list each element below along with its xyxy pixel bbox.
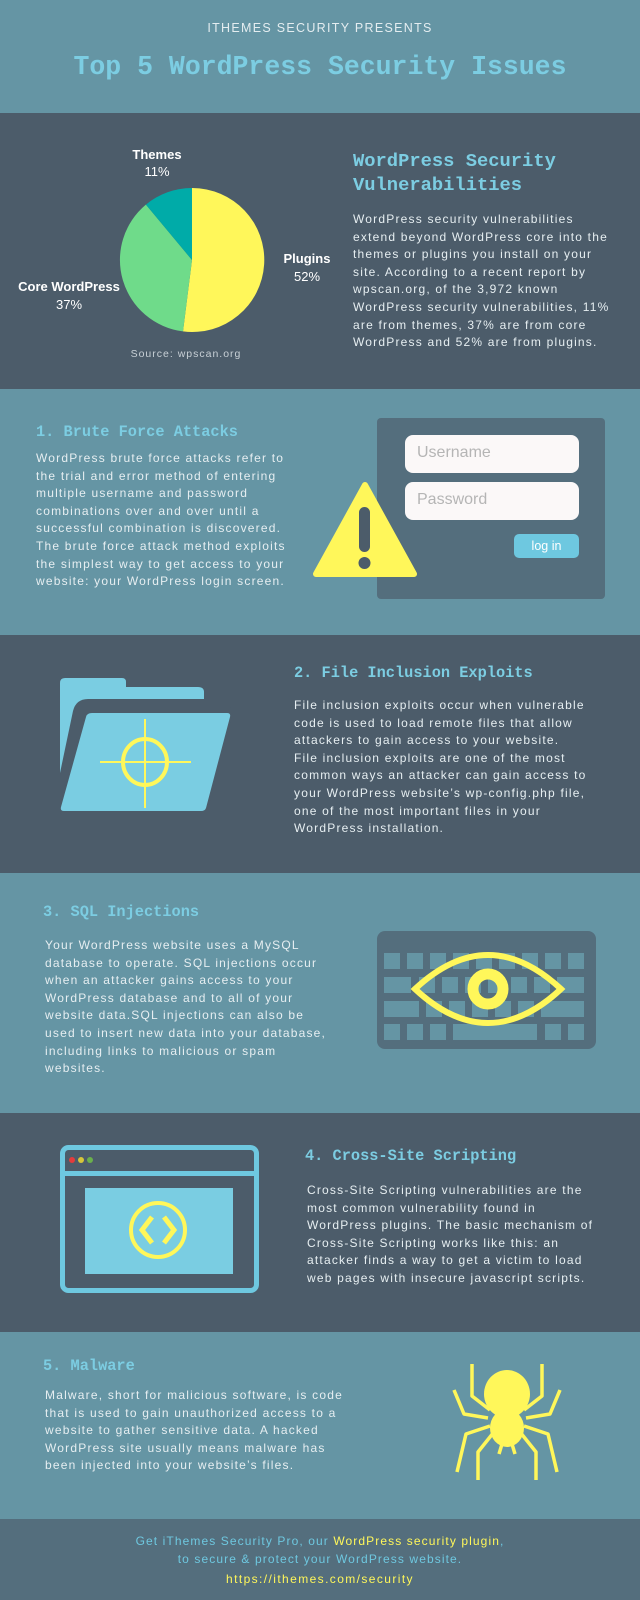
- text: malware: website to gather sensitive data. A hacked: [45, 1423, 319, 1437]
- text: brute force: The brute force attack method exploits: [36, 539, 286, 553]
- icon: spider: [452, 1364, 562, 1480]
- text: xss: Cross-Site Scripting works like this: an: [307, 1236, 559, 1250]
- text: vulnerabilities: site. According to a recent report by: [353, 265, 586, 279]
- text: brute force: WordPress brute force attacks refer to: [36, 451, 284, 465]
- icon: warning: [313, 482, 417, 577]
- footer text: [136, 1534, 504, 1566]
- footer url: https://ithemes.com/security: [226, 1572, 414, 1586]
- panel: footer: [0, 1519, 640, 1600]
- text: malware: been injected into your website’s files.: [45, 1458, 294, 1472]
- text: sql: used to insert new data into your database,: [45, 1026, 326, 1040]
- text: xss: WordPress plugins. The basic mechanism of: [307, 1218, 593, 1232]
- panel: file inclusion: [0, 635, 640, 873]
- text: file inclusion: WordPress installation.: [294, 821, 444, 835]
- text: vulnerabilities: themes or plugins you install on your: [353, 247, 592, 261]
- pie chart: [18, 147, 330, 360]
- heading: xss: 4. Cross-Site Scripting: [305, 1147, 516, 1165]
- icon: keyboard with eye: [377, 931, 596, 1049]
- text: brute force: multiple username and password: [36, 486, 248, 500]
- login button: [514, 534, 579, 558]
- heading: sql: 3. SQL Injections: [43, 903, 199, 921]
- text: vulnerabilities: are from themes, 37% are from core: [353, 318, 587, 332]
- heading: file inclusion: 2. File Inclusion Exploits: [294, 664, 533, 682]
- text: malware: WordPress site usually means malware has: [45, 1441, 326, 1455]
- pie chart: 11%: [144, 164, 170, 179]
- pie chart: Source: wpscan.org: [131, 348, 241, 360]
- pie chart: Core WordPress: [18, 279, 120, 294]
- heading: brute force: 1. Brute Force Attacks: [36, 423, 238, 441]
- text: vulnerabilities: extend beyond WordPress core into the: [353, 230, 608, 244]
- icon: folder: [60, 678, 230, 811]
- text: vulnerabilities: WordPress security vulnerabilities, 11%: [353, 300, 609, 314]
- pie chart: Themes: [132, 147, 182, 162]
- icon: browser window: [60, 1145, 259, 1293]
- text: sql: websites.: [45, 1061, 106, 1075]
- text: sql: Your WordPress website uses a MySQL: [45, 938, 300, 952]
- text: file inclusion: your WordPress website’s wp-config.php file,: [294, 786, 585, 800]
- text: brute force: website: your WordPress login screen.: [36, 574, 285, 588]
- panel: header: [0, 0, 640, 113]
- text: sql: website data.SQL injections can also be: [45, 1008, 304, 1022]
- footer text: to secure & protect your WordPress website.: [178, 1552, 462, 1566]
- text: brute force: the simplest way to get access to your: [36, 557, 284, 571]
- text: sql: WordPress database and to all of your: [45, 991, 293, 1005]
- password field: Password: [417, 491, 487, 508]
- panel: brute force: [0, 389, 640, 635]
- panel: sql injections: [0, 873, 640, 1113]
- panel: cross-site scripting: [0, 1113, 640, 1332]
- text: vulnerabilities: [353, 212, 609, 349]
- login panel: [377, 418, 605, 599]
- text: file inclusion: attackers to gain access to your website.: [294, 733, 559, 747]
- text: sql: when an attacker gains access to your: [45, 973, 294, 987]
- text: brute force: combinations over and over until a: [36, 504, 260, 518]
- text: file inclusion: common ways an attacker can gain access to: [294, 768, 587, 782]
- password field: [405, 482, 579, 520]
- text: malware: [45, 1388, 343, 1472]
- text: sql: including links to malicious or spam: [45, 1044, 276, 1058]
- subtitle: ITHEMES SECURITY PRESENTS: [207, 21, 433, 35]
- text: vulnerabilities: wpscan.org, of the 3,972 known: [353, 282, 558, 296]
- text: malware: Malware, short for malicious software, is code: [45, 1388, 343, 1402]
- text: file inclusion: [294, 698, 587, 835]
- login button: log in: [532, 539, 561, 553]
- text: file inclusion: code is used to load remote files that allow: [294, 716, 573, 730]
- text: brute force: successful combination is discovered.: [36, 521, 281, 535]
- text: xss: [307, 1183, 593, 1285]
- text: xss: web pages with insecure javascript scripts.: [307, 1271, 585, 1285]
- pie chart: 52%: [294, 269, 320, 284]
- text: vulnerabilities: WordPress and 52% are from plugins.: [353, 335, 598, 349]
- text: brute force: the trial and error method of entering: [36, 469, 276, 483]
- heading: malware: 5. Malware: [43, 1357, 135, 1375]
- username field: [405, 435, 579, 473]
- pie chart: Plugins: [284, 251, 330, 266]
- text: vulnerabilities: WordPress security vulnerabilities: [353, 212, 574, 226]
- text: sql: database to operate. SQL injections occur: [45, 956, 317, 970]
- username field: Username: [417, 444, 491, 461]
- text: file inclusion: File inclusion exploits occur when vulnerable: [294, 698, 585, 712]
- heading: vulnerabilities: Vulnerabilities: [353, 174, 522, 196]
- footer text: Get iThemes Security Pro, our WordPress security plugin,: [136, 1534, 504, 1548]
- text: xss: most common vulnerability found in: [307, 1201, 536, 1215]
- title: Top 5 WordPress Security Issues: [74, 52, 566, 82]
- text: xss: Cross-Site Scripting vulnerabilities are the: [307, 1183, 583, 1197]
- text: file inclusion: File inclusion exploits are one of the most: [294, 751, 566, 765]
- panel: malware: [0, 1332, 640, 1519]
- text: file inclusion: one of the most important files in your: [294, 804, 541, 818]
- text: sql: [45, 938, 326, 1075]
- heading: vulnerabilities: [353, 150, 556, 196]
- heading: vulnerabilities: WordPress Security: [353, 150, 556, 172]
- text: brute force: [36, 451, 286, 588]
- text: malware: that is used to gain unauthorized access to a: [45, 1406, 336, 1420]
- pie chart: 37%: [56, 297, 82, 312]
- text: xss: attacker finds a way to get a victim to load: [307, 1253, 583, 1267]
- panel: vulnerabilities overview: [0, 113, 640, 389]
